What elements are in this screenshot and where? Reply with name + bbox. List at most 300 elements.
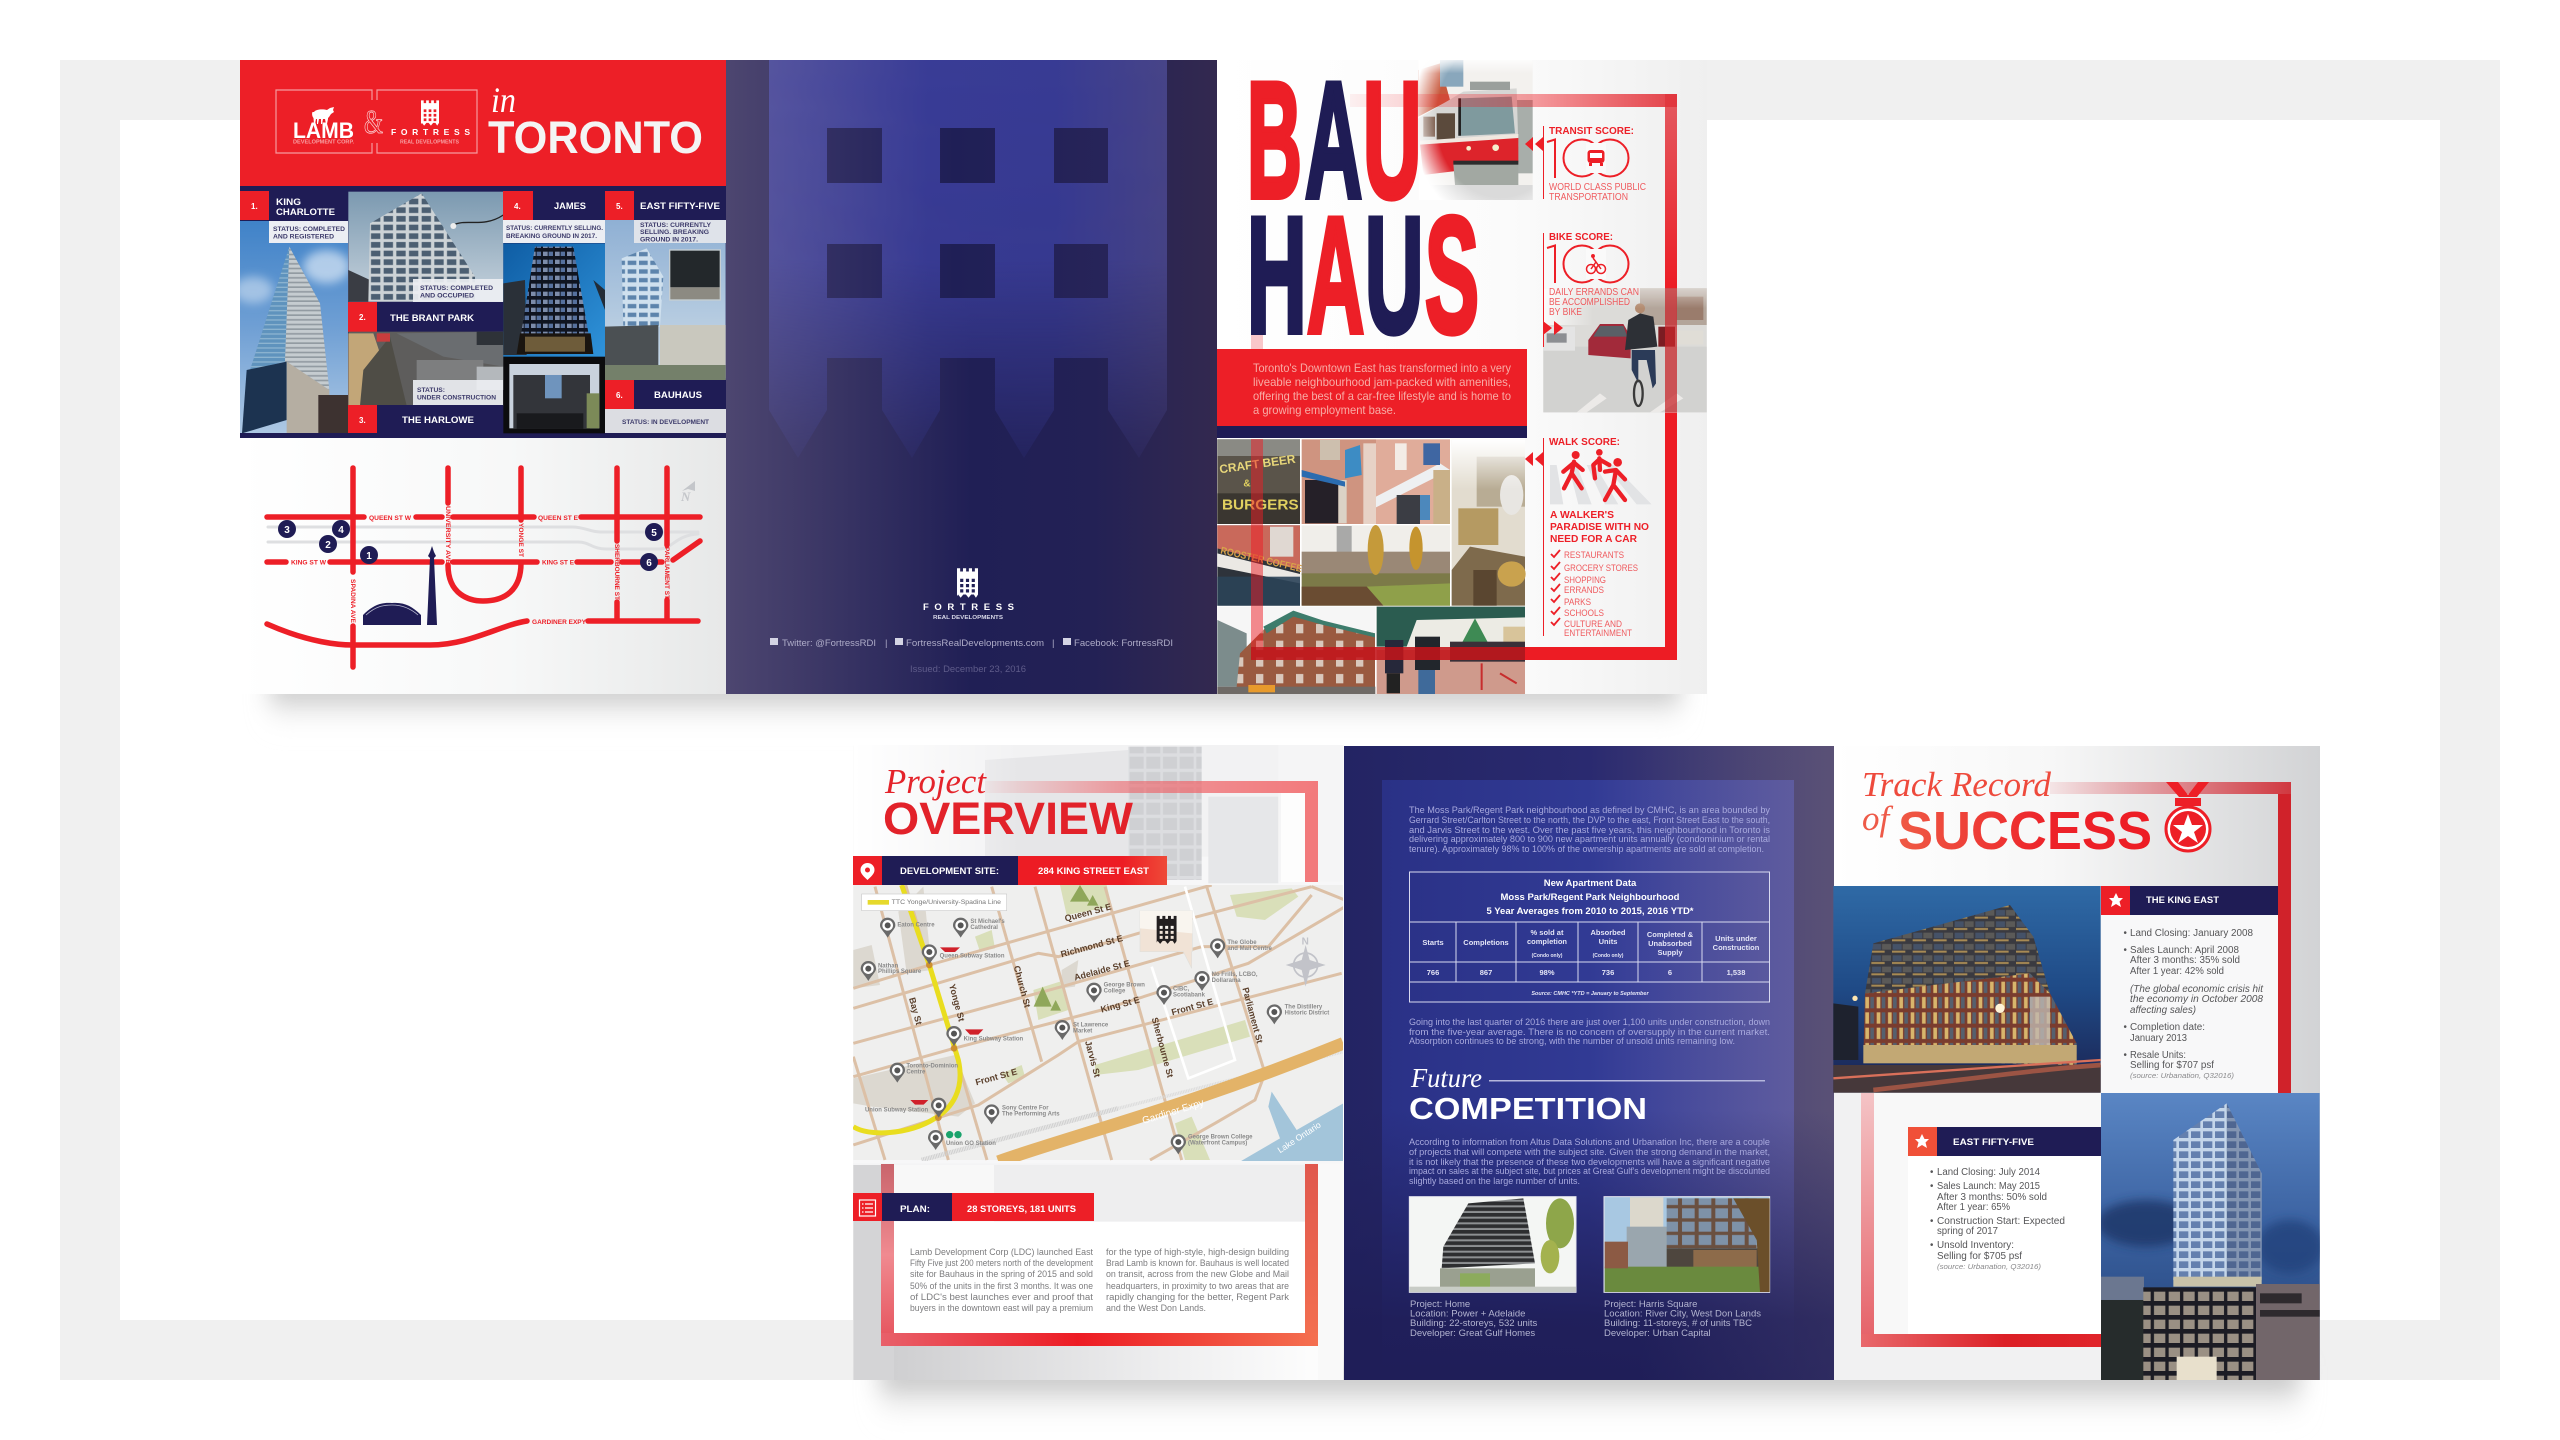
checklist: CULTURE AND	[1564, 619, 1622, 629]
pin labels: Toronto-Dominion	[906, 1063, 958, 1069]
site callout	[1140, 911, 1192, 968]
pin labels: College	[1104, 989, 1126, 995]
title: Bauhaus: H	[1247, 183, 1307, 367]
photo: Home	[1409, 1197, 1576, 1292]
plan bar	[853, 1193, 1094, 1221]
card: East Fifty-Five: Construction Start: Expected	[1937, 1216, 2065, 1227]
title: Bauhaus	[1247, 47, 1479, 368]
contact details: Twitter: @FortressRDI	[782, 638, 876, 649]
street labels: Richmond St E	[1060, 933, 1124, 959]
title: Track Record of Success	[1862, 765, 2152, 861]
second paragraph	[1409, 1017, 1770, 1047]
street map: QUEEN ST E	[538, 515, 579, 522]
competition paragraph: of projects that will compete with the subject site. Given the strong demand in the market,	[1409, 1147, 1770, 1158]
tile: 4 James: STATUS: CURRENTLY SELLING.	[506, 225, 603, 232]
table: new apartment data: Absorbed	[1590, 928, 1626, 937]
card: East Fifty-Five: Sales Launch: May 2015	[1937, 1181, 2040, 1192]
street map: 5	[651, 528, 657, 539]
title: Bauhaus: S	[1425, 182, 1479, 368]
title: Bauhaus: B	[1247, 49, 1302, 233]
street map: YONGE ST	[517, 523, 524, 557]
card: The King East: •	[2124, 945, 2128, 956]
competition paragraph: impact on sales at the subject site, but prices at Great Gulf's development might be discounted	[1409, 1166, 1770, 1177]
table: new apartment data: New Apartment Data	[1544, 878, 1637, 889]
tile: 4 James: BREAKING GROUND IN 2017.	[506, 233, 597, 240]
tile: 2 The Brant Park	[348, 192, 503, 332]
plan description: on transit, across from the new Globe and Mail	[1106, 1269, 1289, 1280]
logo: Fortress: REAL DEVELOPMENTS	[933, 615, 1003, 621]
card: East Fifty-Five: (source: Urbanation, Q32016)	[1937, 1264, 2041, 1271]
street map: 4	[338, 525, 344, 536]
card: The King East: Resale Units:	[2130, 1050, 2186, 1061]
street labels: Lake Ontario	[1276, 1120, 1323, 1155]
intro paragraph: The Moss Park/Regent Park neighbourhood as defined by CMHC, is an area bounded by	[1409, 805, 1770, 816]
second paragraph: Absorption continues to be strong, with the number of unsold units remaining low.	[1409, 1036, 1735, 1047]
card: The King East: (source: Urbanation, Q32016)	[2130, 1073, 2234, 1080]
pin labels: King Subway Station	[964, 1037, 1024, 1043]
title: in Toronto	[488, 80, 703, 163]
card: The King East: •	[2124, 1022, 2128, 1033]
intro paragraph	[1409, 805, 1770, 855]
table: new apartment data: (Condo only)	[1593, 953, 1624, 959]
pin labels: Phillips Square	[878, 969, 922, 975]
development site bar: 284 KING STREET EAST	[1038, 866, 1149, 877]
north arrow	[680, 481, 695, 504]
card: East Fifty-Five: EAST FIFTY-FIVE	[1953, 1137, 2034, 1148]
table: new apartment data: 766	[1427, 968, 1439, 977]
title: Track Record of Success: Track Record	[1862, 765, 2051, 804]
plan description: rapidly changing for the better, Regent Park	[1106, 1292, 1289, 1303]
tile: 1 King Charlotte: 1.	[251, 202, 258, 211]
development site bar: DEVELOPMENT SITE:	[900, 866, 999, 877]
neighbourhood photo collage: CRAFT BEER	[1218, 452, 1297, 476]
intro paragraph: and Jarvis Street to the west. Over the past five years, this neighbourhood in Toronto is	[1409, 825, 1770, 836]
transit score: TRANSPORTATION	[1549, 192, 1628, 203]
tile: 2 The Brant Park: STATUS: COMPLETED	[420, 285, 493, 292]
captions: Developer: Great Gulf Homes	[1410, 1328, 1535, 1339]
intro text box	[1217, 349, 1527, 438]
walk score: PARADISE WITH NO	[1550, 521, 1649, 533]
contact details: FortressRealDevelopments.com	[906, 638, 1044, 649]
ampersand: &	[364, 104, 383, 141]
title: Future Competition: Future	[1410, 1063, 1482, 1093]
tile: 2 The Brant Park: THE BRANT PARK	[390, 313, 474, 324]
photo: East Fifty-Five tower	[2097, 1093, 2323, 1380]
street map: SHERBOURNE ST	[613, 544, 620, 600]
pin labels: Centre	[906, 1069, 926, 1075]
title: Project Overview: OVERVIEW	[883, 793, 1134, 844]
table: new apartment data: 736	[1602, 968, 1614, 977]
bike score: BE ACCOMPLISHED	[1549, 297, 1630, 308]
checklist: PARKS	[1564, 597, 1591, 607]
red frame	[1251, 94, 1677, 660]
title: Future Competition	[1409, 1063, 1765, 1126]
checklist	[1551, 550, 1638, 638]
table: new apartment data: 867	[1480, 968, 1492, 977]
intro text box: Toronto's Downtown East has transformed into a very	[1253, 361, 1511, 375]
captions: Developer: Urban Capital	[1604, 1328, 1711, 1339]
north arrow: N	[680, 489, 691, 504]
card: The King East: the economy in October 2008	[2130, 994, 2264, 1005]
table: new apartment data: Unabsorbed	[1648, 939, 1692, 948]
street labels: Queen St E	[1064, 902, 1112, 924]
pin labels: Sony Centre For	[1002, 1105, 1049, 1111]
captions	[1410, 1299, 1761, 1339]
street labels: Yonge St	[947, 983, 967, 1022]
street map: QUEEN ST W	[369, 515, 412, 522]
pin labels: Dollarama	[1212, 978, 1241, 984]
pin labels: Historic District	[1285, 1010, 1329, 1016]
tile: 2 The Brant Park: AND OCCUPIED	[420, 292, 474, 300]
pin labels: Market	[1073, 1028, 1092, 1034]
table: new apartment data	[1409, 872, 1770, 1002]
card: East Fifty-Five	[1908, 1127, 2101, 1334]
map legend: TTC Yonge/University-Spadina Line	[892, 899, 1001, 906]
neighbourhood photo collage: ROOSTER COFFEE	[1219, 546, 1303, 575]
title: in Toronto: TORONTO	[488, 112, 703, 163]
table: new apartment data: Source: CMHC *YTD = January to September	[1531, 991, 1649, 997]
checklist: RESTAURANTS	[1564, 550, 1624, 560]
drop shadows	[270, 680, 2300, 1426]
tile: 1 King Charlotte: STATUS: COMPLETED	[273, 226, 345, 233]
checklist: SCHOOLS	[1564, 608, 1604, 618]
street labels: Front St E	[1170, 996, 1214, 1017]
plan description: of LDC's best launches ever and proof that	[910, 1292, 1093, 1303]
card: The King East: THE KING EAST	[2146, 895, 2220, 905]
title: Bauhaus: A	[1307, 184, 1364, 368]
plan description: site for Bauhaus in the spring of 2015 and sold	[910, 1269, 1093, 1280]
title: Bauhaus: U	[1365, 182, 1423, 368]
compass: N	[1302, 936, 1309, 947]
tile: 5 East Fifty-Five: GROUND IN 2017.	[640, 236, 698, 244]
card: The King East: affecting sales)	[2130, 1005, 2196, 1016]
GO logo	[946, 1131, 962, 1138]
walk score	[1525, 437, 1652, 638]
checklist: ERRANDS	[1564, 585, 1604, 595]
pin labels: Eaton Centre	[897, 923, 935, 929]
competition paragraph	[1409, 1137, 1770, 1187]
street map: 2	[325, 540, 331, 551]
pin labels: Cathedral	[970, 925, 998, 931]
lower red frame	[881, 1164, 1318, 1346]
competition paragraph: it is not likely that the presence of these two developments will have a significant negative	[1409, 1157, 1770, 1168]
logo: Fortress: FORTRESS	[391, 127, 470, 137]
pin labels: George Brown College	[1188, 1134, 1253, 1140]
icon: medal	[2166, 782, 2210, 851]
street labels: Sherbourne St	[1150, 1016, 1175, 1079]
tile: 5 East Fifty-Five: STATUS: CURRENTLY	[640, 222, 712, 229]
captions: Building: 11-storeys, # of units TBC	[1604, 1318, 1752, 1329]
tile: 5 East Fifty-Five: EAST FIFTY-FIVE	[640, 201, 720, 212]
street map: SPADINA AVE	[349, 579, 356, 624]
table: new apartment data: 5 Year Averages from 2010 to 2015, 2016 YTD*	[1486, 906, 1694, 917]
street labels: Parliament St	[1240, 986, 1265, 1044]
pin labels: Queen Subway Station	[940, 953, 1005, 959]
walk score: NEED FOR A CAR	[1550, 533, 1637, 545]
competition paragraph: According to information from Altus Data Solutions and Urbanation Inc, there are a couple	[1409, 1137, 1770, 1148]
icon: bus	[1588, 150, 1604, 166]
card: East Fifty-Five: •	[1930, 1167, 1934, 1178]
checklist: ENTERTAINMENT	[1564, 628, 1632, 638]
tile: 4 James: JAMES	[554, 201, 586, 212]
table: new apartment data: Starts	[1422, 938, 1444, 947]
logo: Lamb: DEVELOPMENT CORP.	[293, 140, 355, 146]
logo: Fortress: FORTRESS	[923, 602, 1014, 613]
upper red frame	[2050, 782, 2291, 1093]
map legend	[862, 894, 1007, 911]
intro text box: offering the best of a car-free lifestyle and is home to	[1253, 389, 1511, 403]
table: new apartment data: 98%	[1539, 968, 1555, 977]
intro paragraph: tenure). Approximately 98% to 100% of the ownership apartments are sold at completion.	[1409, 844, 1764, 855]
street map: KING ST E	[542, 560, 575, 566]
street map: KING ST W	[291, 560, 327, 566]
table: new apartment data: Completed &	[1647, 930, 1694, 939]
TTC logos	[910, 947, 983, 1105]
street map: 3	[284, 525, 290, 536]
checklist: GROCERY STORES	[1564, 563, 1638, 573]
pin labels: Nathan	[878, 963, 899, 969]
tile: 3 The Harlowe: UNDER CONSTRUCTION	[417, 394, 496, 402]
bike photo	[1543, 288, 1707, 412]
tile: 1 King Charlotte: KING	[276, 197, 301, 208]
issue date: Issued: December 23, 2016	[910, 664, 1026, 674]
table: new apartment data: 6	[1668, 968, 1672, 977]
captions: Location: Power + Adelaide	[1410, 1308, 1525, 1320]
CN tower	[427, 501, 437, 625]
pin labels: The Globe	[1227, 940, 1257, 946]
card: The King East: •	[2124, 928, 2128, 939]
card: East Fifty-Five: •	[1930, 1181, 1934, 1192]
street labels: Jarvis St	[1083, 1040, 1102, 1078]
logo: Fortress: REAL DEVELOPMENTS	[400, 140, 460, 146]
card: The King East: After 1 year: 42% sold	[2130, 966, 2224, 977]
pin labels	[865, 919, 1329, 1147]
competition paragraph: slightly based on the large number of units.	[1409, 1176, 1580, 1187]
card: The King East: After 3 months: 35% sold	[2130, 955, 2240, 966]
contact details	[770, 638, 1173, 649]
bike score	[1543, 232, 1639, 347]
pin labels: CIBC,	[1173, 986, 1190, 992]
card: The King East: Selling for $707 psf	[2130, 1060, 2214, 1071]
plan description: headquarters, in proximity to two areas that are	[1106, 1281, 1289, 1292]
tile: 1 King Charlotte: CHARLOTTE	[276, 207, 335, 218]
panel: Bauhaus	[1217, 47, 1707, 694]
intro paragraph: Gerrard Street/Carlton Street to the north, the DVP to the east, Front Street East to the south,	[1409, 815, 1770, 826]
contact details: |	[885, 638, 887, 649]
walk score: A WALKER'S	[1550, 509, 1614, 521]
second paragraph: from the five-year average. There is no concern of oversupply in the current market.	[1409, 1027, 1770, 1038]
title: Bauhaus: U	[1363, 47, 1421, 233]
pin labels: No Frills, LCBO,	[1212, 972, 1258, 978]
street map: PARLIAMENT ST	[663, 547, 670, 599]
card: East Fifty-Five: After 3 months: 50% sold	[1937, 1192, 2047, 1203]
card: East Fifty-Five: Unsold Inventory:	[1937, 1240, 2014, 1251]
street labels: Gardiner Expy	[1141, 1098, 1205, 1127]
street map: GARDINER EXPY	[532, 619, 587, 626]
stadium	[363, 603, 421, 625]
neighbourhood photo collage: BURGERS	[1222, 497, 1299, 513]
card: The King East: Land Closing: January 2008	[2130, 928, 2253, 939]
pin labels: Union Subway Station	[865, 1108, 929, 1114]
tile: 5 East Fifty-Five: 5.	[616, 202, 623, 211]
card: East Fifty-Five: •	[1930, 1216, 1934, 1227]
pin labels: The Distillery	[1285, 1004, 1323, 1010]
red header band	[240, 60, 726, 186]
plan description: and the West Don Lands.	[1106, 1303, 1206, 1314]
plan description: Lamb Development Corp (LDC) launched East	[910, 1247, 1093, 1258]
street labels: Bay St	[907, 996, 924, 1026]
intro text box: a growing employment base.	[1253, 403, 1396, 417]
pin labels: St Lawrence	[1073, 1022, 1109, 1028]
tile: 5 East Fifty-Five	[605, 191, 726, 380]
plan description: Brad Lamb is known for. Bauhaus is well located	[1106, 1258, 1289, 1269]
compass	[1286, 936, 1326, 987]
plan description	[910, 1247, 1289, 1314]
pin labels: and Mail Centre	[1227, 946, 1273, 952]
card: East Fifty-Five: •	[1930, 1240, 1934, 1251]
street map: 1	[366, 551, 372, 562]
tile: 1 King Charlotte	[233, 191, 350, 433]
street labels: Front St E	[974, 1066, 1018, 1087]
card: East Fifty-Five: spring of 2017	[1937, 1226, 1998, 1237]
street map: UNIVERSITY AVE	[444, 506, 451, 565]
bike score: BIKE SCORE:	[1549, 232, 1613, 243]
tile: 6 Bauhaus	[605, 380, 726, 433]
bike score: DAILY ERRANDS CAN	[1549, 287, 1639, 298]
logo: Fortress	[923, 568, 1014, 621]
table: new apartment data: Units	[1599, 937, 1617, 946]
bike score: BY BIKE	[1549, 307, 1582, 318]
neighbourhood photo collage: &	[1243, 479, 1251, 490]
table: new apartment data: % sold at	[1531, 928, 1564, 937]
icon: walkers on crossing	[1550, 449, 1652, 504]
title: Project Overview: Project	[884, 762, 987, 801]
street labels: Adelaide St E	[1073, 958, 1131, 983]
street map: 6	[646, 558, 652, 569]
table: new apartment data: completion	[1527, 937, 1567, 946]
title: Future Competition: COMPETITION	[1409, 1091, 1647, 1126]
lower red frame	[1861, 1093, 2101, 1347]
title: Bauhaus: A	[1305, 49, 1362, 233]
plan description: Fifty Five just 200 meters north of the development	[910, 1258, 1093, 1269]
pin labels: Scotiabank	[1173, 992, 1206, 998]
card: The King East: (The global economic crisis hit	[2130, 984, 2264, 995]
contact details: |	[1052, 638, 1054, 649]
pin labels: The Performing Arts	[1002, 1112, 1060, 1118]
tile: 3 The Harlowe: STATUS:	[417, 387, 445, 394]
map	[853, 883, 1345, 1162]
logo: Lamb: LAMB	[293, 118, 354, 143]
tile: 4 James	[503, 191, 605, 433]
plan description: 50% of the units in the first 3 months. It was one	[910, 1281, 1093, 1292]
tile: 1 King Charlotte: AND REGISTERED	[273, 234, 334, 240]
plan bar: 28 STOREYS, 181 UNITS	[967, 1204, 1076, 1215]
intro paragraph: delivering approximately 800 to 900 new apartment units annually (condominium or rental	[1409, 834, 1770, 845]
pin labels: George Brown	[1104, 983, 1145, 989]
street labels	[907, 902, 1323, 1155]
upper red frame	[985, 781, 1318, 882]
plan description: for the type of high-style, high-design building	[1106, 1247, 1289, 1258]
card: East Fifty-Five: Land Closing: July 2014	[1937, 1167, 2041, 1178]
captions: Project: Home	[1410, 1299, 1470, 1310]
tile: 2 The Brant Park: 2.	[359, 313, 366, 322]
tile: 3 The Harlowe: THE HARLOWE	[402, 415, 474, 426]
transit score: TRANSIT SCORE:	[1549, 126, 1634, 137]
photo: Harris Square	[1604, 1197, 1770, 1292]
card: The King East: Completion date:	[2130, 1022, 2205, 1033]
tile: 6 Bauhaus: STATUS: IN DEVELOPMENT	[622, 419, 709, 426]
second paragraph: Going into the last quarter of 2016 there are just over 1,100 units under construction, down	[1409, 1017, 1770, 1028]
checklist: SHOPPING	[1564, 575, 1606, 585]
panel: market data and future competition	[1344, 746, 1834, 1380]
card: The King East: January 2013	[2130, 1033, 2187, 1044]
panel: track record of success	[1833, 746, 2323, 1380]
table: new apartment data: 1,538	[1727, 968, 1745, 977]
tile: 6 Bauhaus: BAUHAUS	[654, 390, 702, 401]
tram photo	[1418, 60, 1533, 200]
tile: 6 Bauhaus: 6.	[616, 391, 623, 400]
title: Track Record of Success: of	[1862, 799, 1894, 838]
logo: Fortress	[377, 90, 477, 153]
transit score: WORLD CLASS PUBLIC	[1549, 182, 1646, 193]
pin labels: (Waterfront Campus)	[1188, 1140, 1247, 1146]
street labels: Church St	[1012, 965, 1033, 1009]
transit score	[1525, 126, 1646, 203]
development site bar	[853, 856, 1167, 885]
table: new apartment data: (Condo only)	[1532, 953, 1563, 959]
photo: The King East	[1833, 886, 2101, 1093]
tile: 4 James: 4.	[514, 202, 521, 211]
title: in Toronto: in	[491, 80, 516, 120]
panel: project overview	[853, 745, 1345, 1380]
logo: Lamb	[276, 90, 372, 153]
captions: Project: Harris Square	[1604, 1299, 1697, 1310]
panel: back cover	[726, 60, 1217, 694]
plan description: buyers in the downtown east will pay a premium	[910, 1303, 1093, 1314]
panel: in Toronto projects	[233, 60, 726, 694]
frame overlay on photos	[1251, 439, 1525, 660]
street map	[267, 468, 700, 667]
table: new apartment data: Supply	[1657, 948, 1683, 957]
card: East Fifty-Five: After 1 year: 65%	[1937, 1202, 2010, 1213]
card: The King East: Sales Launch: April 2008	[2130, 945, 2239, 956]
table: new apartment data: Moss Park/Regent Park Neighbourhood	[1501, 892, 1680, 903]
plan bar: PLAN:	[900, 1204, 930, 1215]
pin labels: Union GO Station	[946, 1141, 996, 1147]
card: East Fifty-Five: Selling for $705 psf	[1937, 1251, 2022, 1262]
contact details: Facebook: FortressRDI	[1074, 638, 1173, 649]
intro text box: liveable neighbourhood jam-packed with amenities,	[1253, 375, 1511, 389]
card: The King East	[2101, 886, 2278, 1093]
table: new apartment data: Completions	[1463, 938, 1509, 947]
neighbourhood photo collage	[1217, 438, 1526, 694]
trees	[1034, 885, 1098, 1011]
title: Track Record of Success: SUCCESS	[1898, 801, 2152, 861]
walk score: WALK SCORE:	[1549, 437, 1620, 448]
captions: Location: River City, West Don Lands	[1604, 1308, 1761, 1320]
captions: Building: 22-storeys, 532 units	[1410, 1318, 1538, 1329]
table: new apartment data: Units under	[1715, 934, 1757, 943]
tile: 3 The Harlowe	[348, 332, 503, 433]
tile: 3 The Harlowe: 3.	[359, 416, 366, 425]
table: new apartment data: Construction	[1713, 943, 1760, 952]
icon: bicycle	[1586, 255, 1606, 274]
title: Project Overview	[883, 762, 1134, 844]
fortress banner	[769, 60, 1167, 458]
card: The King East: •	[2124, 1050, 2128, 1061]
tile: 5 East Fifty-Five: SELLING. BREAKING	[640, 229, 709, 236]
pin labels: St Michael's	[970, 919, 1005, 925]
